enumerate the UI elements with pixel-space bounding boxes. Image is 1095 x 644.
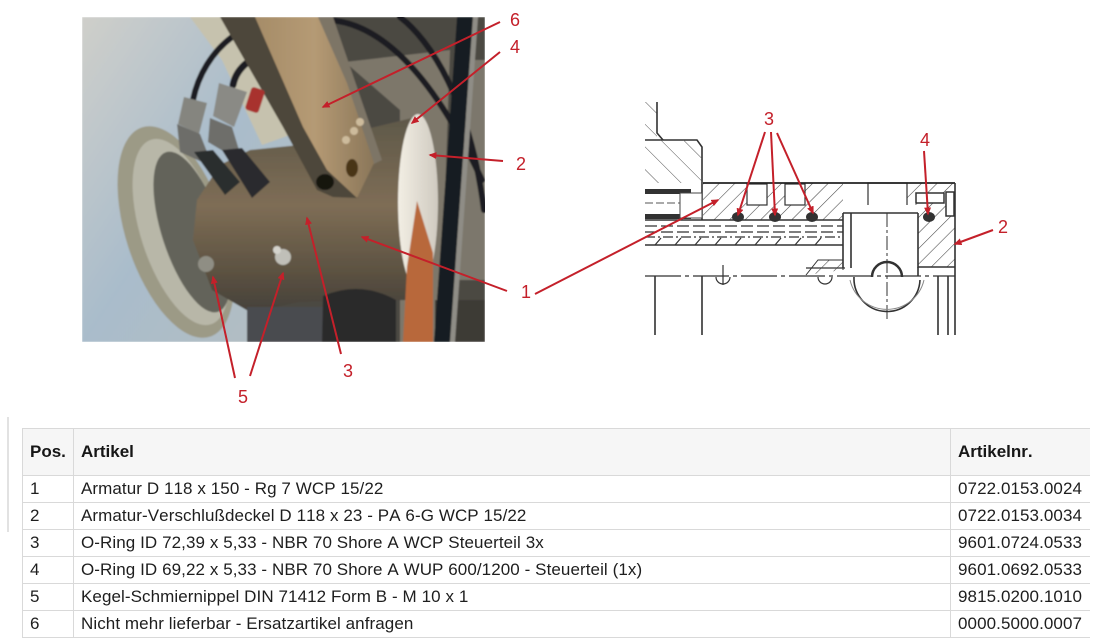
parts table: 9815.0200.1010: [958, 587, 1082, 606]
position numbers: drawing: [764, 109, 1008, 237]
photo: grey connectors: [177, 83, 270, 198]
parts table: Artikelnr.: [958, 442, 1033, 461]
parts table: 6: [30, 614, 40, 633]
parts table: Kegel-Schmiernippel DIN 71412 Form B - M 10 x 1: [81, 587, 468, 606]
parts table: 0722.0153.0024: [958, 479, 1082, 498]
photo: orange plate: [403, 201, 433, 342]
parts table: O-Ring ID 72,39 x 5,33 - NBR 70 Shore A WCP Steuerteil 3x: [81, 533, 544, 552]
position numbers: photo: 6: [510, 10, 520, 30]
position numbers: photo: 2: [516, 154, 526, 174]
position numbers: photo: 4: [510, 37, 520, 57]
parts table: 0000.5000.0007: [958, 614, 1082, 633]
position numbers: photo: 1: [521, 282, 531, 302]
parts table: Artikel: [81, 442, 134, 461]
photo: lower black pipe: [247, 307, 323, 342]
parts table: Nicht mehr lieferbar - Ersatzartikel anfragen: [81, 614, 413, 633]
annotation arrows: drawing: [535, 132, 993, 294]
drawing: O-ring seats: [732, 212, 935, 222]
position numbers: photo: 5: [238, 387, 248, 407]
parts table: O-Ring ID 69,22 x 5,33 - NBR 70 Shore A WUP 600/1200 - Steuerteil (1x): [81, 560, 642, 579]
photo: black hoses: [193, 17, 484, 210]
position numbers: drawing: 3: [764, 109, 774, 129]
parts table: 5: [30, 587, 40, 606]
annotation arrows: photo: [213, 22, 507, 378]
drawing: centre line and legs: [645, 260, 955, 335]
photo: dark sleeve and bronze pipe: [220, 17, 382, 198]
drawing: centre cavity and cover: [843, 183, 955, 335]
technical section drawing: [645, 102, 955, 335]
parts table: 9601.0724.0533: [958, 533, 1082, 552]
left sidebar line: [7, 417, 9, 532]
drawing: upper left housing: [645, 102, 702, 220]
parts table: 3: [30, 533, 40, 552]
photo background: wall and dark recess: [82, 17, 485, 342]
photo: cylindrical fitting body: [193, 118, 412, 312]
parts table: 4: [30, 560, 40, 579]
photo: grease nipples: [198, 246, 291, 272]
position numbers: photo: [238, 10, 531, 407]
photo: white closure cover: [398, 114, 438, 290]
parts table: [22, 428, 1090, 638]
drawing: cover screw: [916, 192, 954, 216]
photo: wall flange: [117, 126, 234, 338]
position numbers: drawing: 4: [920, 130, 930, 150]
drawing: left bolt detail: [645, 189, 702, 219]
photo: installed fitting: [82, 17, 485, 352]
parts table: Armatur D 118 x 150 - Rg 7 WCP 15/22: [81, 479, 383, 498]
parts table: 9601.0692.0533: [958, 560, 1082, 579]
parts table: 1: [30, 479, 40, 498]
position numbers: drawing: 2: [998, 217, 1008, 237]
drawing: inner shaft: [645, 220, 843, 245]
position numbers: photo: 3: [343, 361, 353, 381]
parts table: Armatur-Verschlußdeckel D 118 x 23 - PA 6-G WCP 15/22: [81, 506, 526, 525]
drawing: hatched sleeve: [703, 183, 955, 220]
photo: vertical black cable: [434, 17, 473, 342]
parts table: Pos.: [30, 442, 66, 461]
parts table: 2: [30, 506, 40, 525]
parts table: 0722.0153.0034: [958, 506, 1082, 525]
